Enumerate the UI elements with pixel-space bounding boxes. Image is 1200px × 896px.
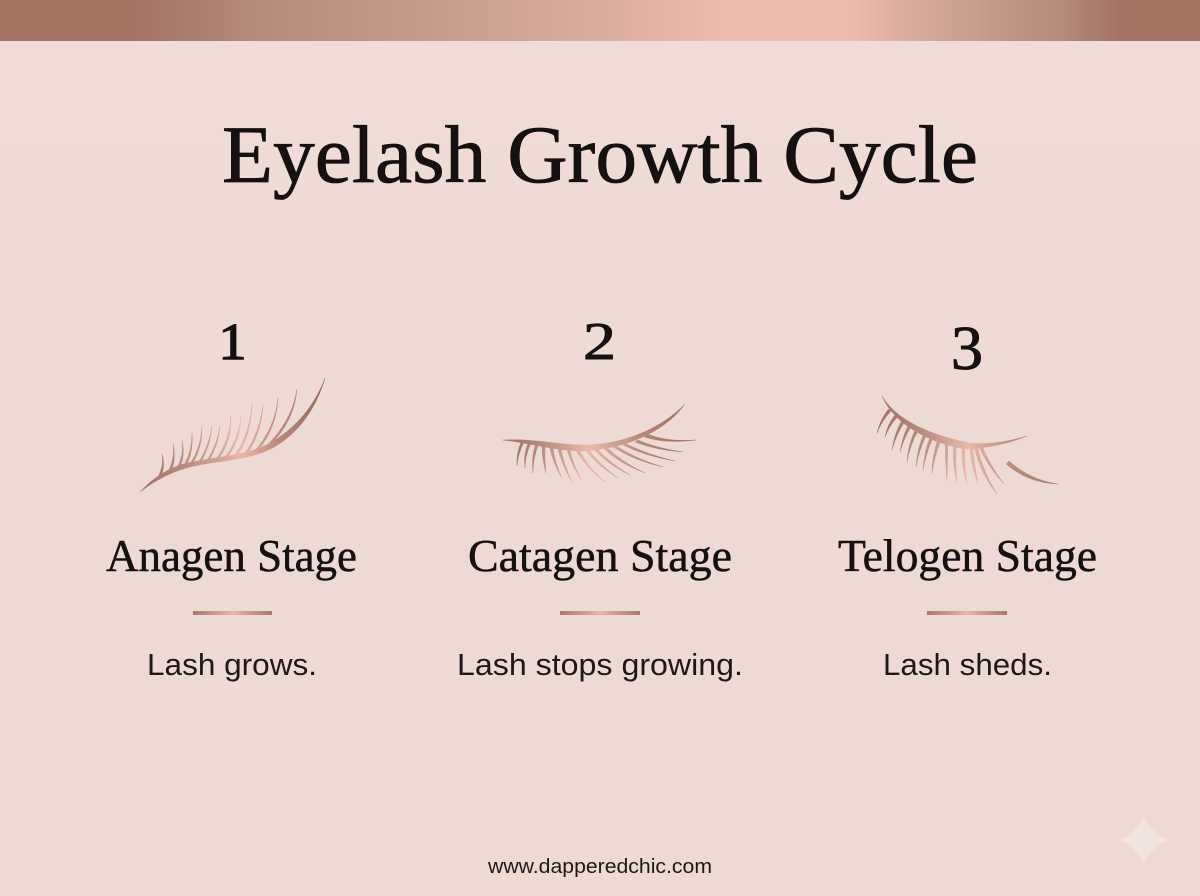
panel: catagen stage — [457, 313, 743, 682]
heading: catagen: Catagen Stage — [468, 530, 732, 581]
description: anagen: Lash grows. — [147, 648, 317, 682]
number 1: 1 — [218, 314, 246, 371]
number 3: 3 — [951, 315, 983, 383]
icon: sparkle — [1120, 816, 1168, 864]
icon: shedding lash — [877, 396, 1058, 494]
footer url: www.dapperedchic.com — [487, 856, 712, 878]
number 2: 2 — [583, 313, 616, 371]
description: telogen: Lash sheds. — [883, 648, 1052, 682]
icon: resting lash — [503, 404, 696, 482]
heading: telogen: Telogen Stage — [838, 530, 1097, 581]
heading: anagen: Anagen Stage — [106, 530, 357, 581]
title: Eyelash Growth Cycle — [222, 109, 978, 200]
icon: growing lash — [140, 378, 325, 492]
description: catagen: Lash stops growing. — [457, 648, 743, 682]
panel: anagen stage — [106, 314, 357, 682]
panel: telogen stage — [838, 315, 1097, 682]
top decorative band — [0, 0, 1200, 41]
